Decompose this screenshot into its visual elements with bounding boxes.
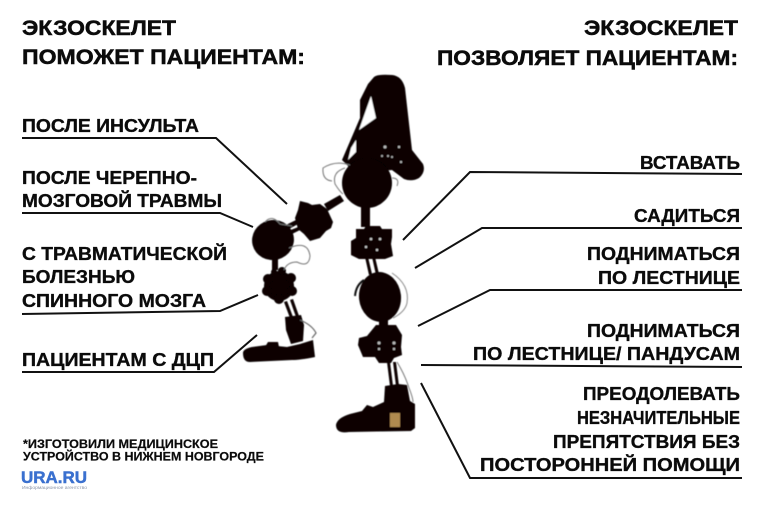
- label: climb stairs: ПО ЛЕСТНИЦЕ: [598, 268, 740, 288]
- heading: left: [22, 17, 305, 69]
- label: stand up: ВСТАВАТЬ: [640, 153, 740, 173]
- label: after head injury: ПОСЛЕ ЧЕРЕПНО-: [22, 168, 197, 188]
- heading: right: [437, 17, 738, 70]
- labels: left column: [22, 116, 287, 372]
- logo: URA.RU: Информационное агентство: [22, 485, 88, 490]
- label: spinal injury: СПИННОГО МОЗГА: [22, 291, 206, 311]
- label: sit down: [415, 206, 742, 268]
- labels: right column: [403, 153, 742, 478]
- label: after head injury: МОЗГОВОЙ ТРАВМЫ: [22, 190, 222, 211]
- label: overcome obstacles: НЕЗНАЧИТЕЛЬНЫЕ: [577, 408, 740, 428]
- label: sit down: САДИТЬСЯ: [634, 206, 740, 226]
- label: overcome obstacles: ПРЕПЯТСТВИЯ БЕЗ: [553, 432, 740, 452]
- label: cerebral palsy: [22, 335, 257, 372]
- label: cerebral palsy: ПАЦИЕНТАМ С ДЦП: [22, 350, 214, 370]
- footnote: *ИЗГОТОВИЛИ МЕДИЦИНСКОЕ: [23, 437, 218, 451]
- label: climb stairs: ПОДНИМАТЬСЯ: [587, 244, 740, 264]
- footnote: [23, 437, 264, 464]
- rear leg: [243, 195, 344, 362]
- heading: right: ПОЗВОЛЯЕТ ПАЦИЕНТАМ:: [437, 47, 738, 70]
- label: stairs and ramps: ПО ЛЕСТНИЦЕ/ ПАНДУСАМ: [473, 344, 740, 364]
- backpack and hip: [323, 75, 424, 208]
- label: overcome obstacles: ПОСТОРОННЕЙ ПОМОЩИ: [480, 454, 740, 475]
- footnote: УСТРОЙСТВО В НИЖНЕМ НОВГОРОДЕ: [23, 448, 264, 464]
- front leg: [336, 205, 415, 432]
- heading: left: ЭКЗОСКЕЛЕТ: [22, 17, 176, 40]
- heading: left: ПОМОЖЕТ ПАЦИЕНТАМ:: [22, 46, 305, 69]
- label: stairs and ramps: ПОДНИМАТЬСЯ: [587, 321, 740, 341]
- label: stand up: [403, 153, 742, 240]
- label: overcome obstacles: [421, 383, 742, 478]
- label: stairs and ramps: [421, 321, 742, 367]
- label: spinal injury: С ТРАВМАТИЧЕСКОЙ: [22, 243, 227, 264]
- label: spinal injury: [22, 243, 258, 314]
- logo: URA.RU: URA.RU: [21, 468, 87, 487]
- label: spinal injury: БОЛЕЗНЬЮ: [22, 267, 135, 287]
- label: climb stairs: [418, 244, 742, 326]
- heading: right: ЭКЗОСКЕЛЕТ: [584, 17, 738, 40]
- label: after head injury: [22, 168, 253, 227]
- exoskeleton silhouette: [243, 75, 424, 432]
- label: after stroke: ПОСЛЕ ИНСУЛЬТА: [22, 116, 199, 136]
- label: after stroke: [22, 116, 287, 204]
- label: overcome obstacles: ПРЕОДОЛЕВАТЬ: [583, 384, 740, 404]
